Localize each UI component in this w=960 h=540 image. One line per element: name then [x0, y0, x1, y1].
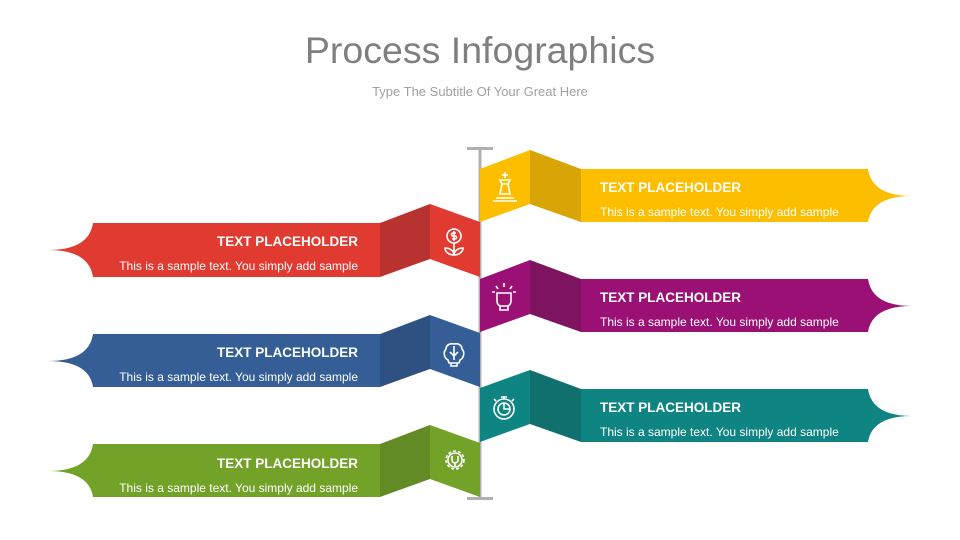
step: blue (left): [48, 315, 480, 387]
step: teal (right): This is a sample text. You simply add sample: [600, 425, 839, 439]
step: yellow (right): [480, 150, 912, 222]
step: red (left): This is a sample text. You simply add sample: [119, 259, 358, 273]
step: blue (left): TEXT PLACEHOLDER: [217, 345, 358, 360]
step: teal (right): TEXT PLACEHOLDER: [600, 400, 741, 415]
step: purple (right): This is a sample text. You simply add sample: [600, 315, 839, 329]
subtitle: Type The Subtitle Of Your Great Here: [372, 84, 588, 99]
step: green (left): TEXT PLACEHOLDER: [217, 456, 358, 471]
icon: fist: [492, 283, 516, 310]
step: red (left): [48, 204, 480, 277]
step: yellow (right): TEXT PLACEHOLDER: [600, 180, 741, 195]
pole: [467, 147, 493, 500]
step: purple (right): [480, 260, 912, 332]
step: green (left): [48, 425, 480, 497]
step: red (left): TEXT PLACEHOLDER: [217, 234, 358, 249]
icon: brain bulb: [444, 344, 464, 366]
icon: stopwatch: [494, 397, 514, 419]
icon: gear: [446, 451, 464, 469]
step: purple (right): TEXT PLACEHOLDER: [600, 290, 741, 305]
icon: chess king: [493, 172, 517, 201]
icon: money plant: [445, 229, 463, 255]
step: green (left): This is a sample text. You simply add sample: [119, 481, 358, 495]
title: Process Infographics: [305, 29, 655, 71]
step: blue (left): This is a sample text. You simply add sample: [119, 370, 358, 384]
step: teal (right): [480, 370, 912, 442]
step: yellow (right): This is a sample text. You simply add sample: [600, 205, 839, 219]
